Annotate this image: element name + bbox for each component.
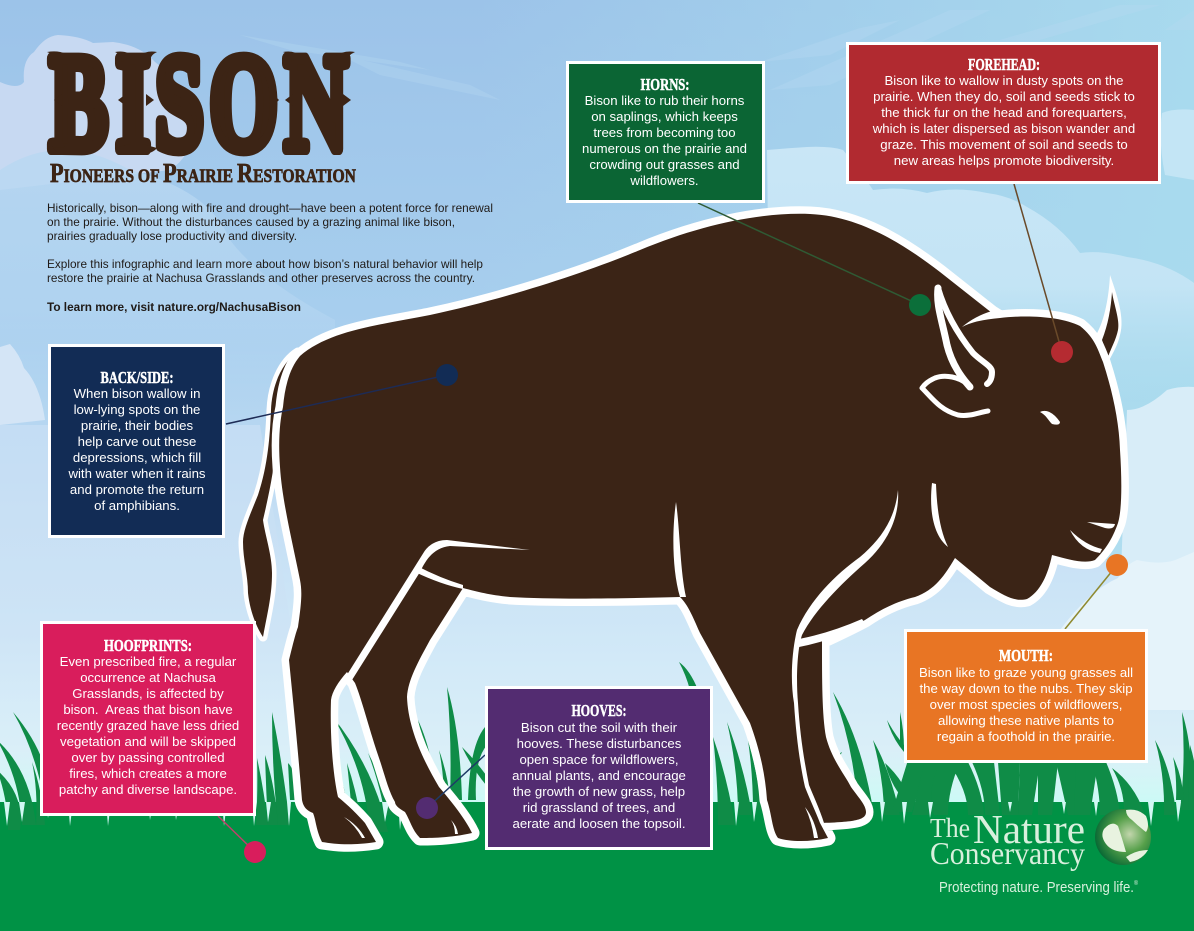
title [47, 28, 355, 180]
panel: forehead: which is later dispersed as bison wander and [872, 121, 1135, 136]
intro text: To learn more, visit nature.org/NachusaBison [47, 301, 301, 314]
panel: forehead: graze. This movement of soil and seeds to [880, 137, 1128, 152]
logo wordmark: Nature [973, 806, 1085, 852]
panel: back/side [50, 346, 224, 536]
intro text [47, 202, 493, 314]
icon: leaf globe [1095, 809, 1151, 865]
panel: horns: on saplings, which keeps [591, 109, 738, 124]
marker: hooves [416, 797, 438, 819]
intro text: on the prairie. Without the disturbances caused by a grazing animal like bison, [47, 216, 455, 229]
panel: hoofprints: Even prescribed fire, a regular [60, 654, 237, 669]
panel: horns: wildflowers. [629, 173, 699, 188]
title word: BISON [49, 28, 348, 180]
panel: hoofprints: recently grazed have less dried [57, 718, 239, 733]
logo tagline: Protecting nature. Preserving life. [939, 880, 1153, 896]
bison body silhouette [279, 214, 1121, 844]
panel: horns: numerous on the prairie and [582, 141, 747, 156]
panel: hoofprints: occurrence at Nachusa [80, 670, 216, 685]
panel: back/side: depressions, which fill [73, 450, 201, 465]
panel: hooves: Bison cut the soil with their [521, 720, 678, 735]
panel: hoofprints: fires, which creates a more [69, 766, 227, 781]
intro text: Historically, bison—along with fire and drought—have been a potent force for renewal [47, 202, 493, 215]
panel: hooves: annual plants, and encourage [512, 768, 686, 783]
marker: horns [909, 294, 931, 316]
panel: hoofprints [42, 622, 254, 814]
panel: back/side: of amphibians. [94, 498, 180, 513]
intro text: Explore this infographic and learn more about how bison’s natural behavior will help [47, 258, 483, 271]
panel: forehead: the thick fur on the head and forequarters, [881, 105, 1127, 120]
panel: hoofprints: vegetation and will be skipped [60, 734, 236, 749]
logo wordmark [930, 806, 1085, 871]
panel: hooves [486, 688, 712, 848]
panel: hoofprints: HOOFPRINTS: [104, 636, 192, 655]
panel: hooves: HOOVES: [572, 701, 626, 720]
panel: back/side: low-lying spots on the [74, 402, 200, 417]
panel: back/side: with water when it rains [67, 466, 206, 481]
panel: forehead [848, 44, 1160, 182]
panel: horns [568, 62, 764, 202]
panel: hoofprints: Grasslands, is affected by [72, 686, 224, 701]
bison illustration [243, 214, 1122, 844]
panel: back/side: BACK/SIDE: [100, 368, 174, 387]
marker: forehead [1051, 341, 1073, 363]
panel: horns: HORNS: [640, 75, 690, 94]
panel: forehead: FOREHEAD: [968, 55, 1040, 74]
panel: horns: trees from becoming too [593, 125, 736, 140]
panel: mouth: over most species of wildflowers, [930, 697, 1122, 712]
panel: horns: crowding out grasses and [589, 157, 740, 172]
panel: mouth [906, 630, 1146, 762]
panel: hoofprints: over by passing controlled [71, 750, 225, 765]
white interior lines [344, 311, 1115, 838]
panel: horns: Bison like to rub their horns [585, 93, 745, 108]
marker: hoofprints [244, 841, 266, 863]
marker: back/side [436, 364, 458, 386]
panel: back/side: and promote the return [70, 482, 204, 497]
logo wordmark: The [930, 813, 970, 843]
panel: forehead: new areas helps promote biodiversity. [894, 153, 1114, 168]
marker: mouth [1106, 554, 1128, 576]
grass [0, 662, 1194, 931]
panel: back/side: help carve out these [78, 434, 196, 449]
panel: mouth: MOUTH: [999, 646, 1053, 665]
leader lines [218, 184, 1117, 852]
intro text: prairies gradually lose productivity and diversity. [47, 230, 297, 243]
panel: forehead: prairie. When they do, soil and seeds stick to [873, 89, 1135, 104]
panel: hooves: hooves. These disturbances [517, 736, 682, 751]
panel: hooves: aerate and loosen the topsoil. [512, 816, 686, 831]
title ornaments [47, 51, 355, 154]
panel: mouth: the way down to the nubs. They skip [919, 681, 1133, 696]
panel: mouth: regain a foothold in the prairie. [937, 729, 1115, 744]
panel: mouth: Bison like to graze young grasses all [919, 665, 1133, 680]
logo: The Nature Conservancy [930, 806, 1151, 896]
tail [243, 352, 298, 637]
logo tagline: ® [1134, 880, 1139, 887]
horn and ear [922, 288, 992, 415]
panel: forehead: Bison like to wallow in dusty spots on the [885, 73, 1123, 88]
panel: back/side: prairie, their bodies [81, 418, 193, 433]
subtitle: PIONEERS OF PRAIRIE RESTORATION [50, 158, 356, 188]
panel: hooves: the growth of new grass, help [513, 784, 685, 799]
panel: back/side: When bison wallow in [74, 386, 200, 401]
grass gaps near ground [4, 802, 1181, 830]
panel: hooves: rid grassland of trees, and [523, 800, 675, 815]
panel: hooves: open space for wildflowers, [519, 752, 679, 767]
right horn [1096, 275, 1122, 364]
panel: mouth: allowing these native plants to [938, 713, 1114, 728]
intro text: restore the prairie at Nachusa Grasslands and other preserves across the country. [47, 272, 475, 285]
panel: hoofprints: bison. Areas that bison have [63, 702, 233, 717]
logo wordmark: Conservancy [930, 835, 1085, 871]
clouds [0, 5, 1194, 720]
panel: hoofprints: patchy and diverse landscape. [59, 782, 237, 797]
